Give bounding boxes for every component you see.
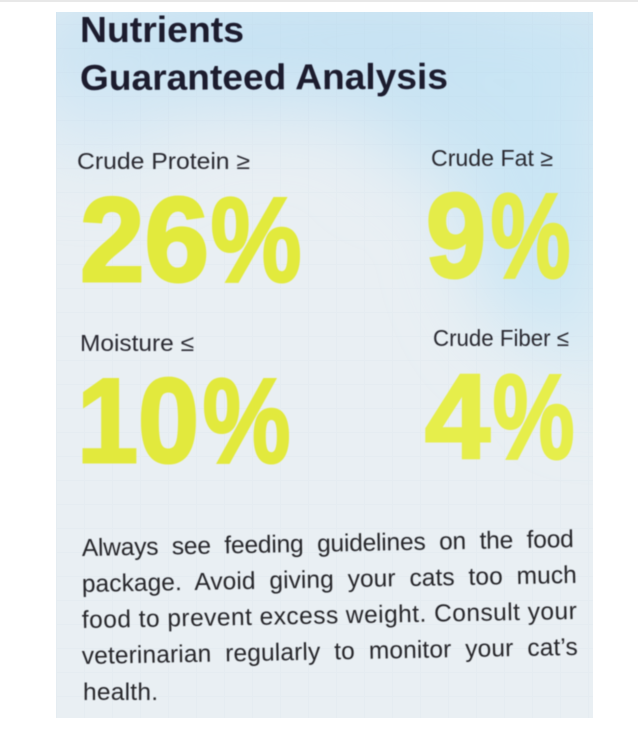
stat: crude fiber: Crude Fiber ≤ [433, 325, 569, 351]
heading: Guaranteed Analysis [80, 56, 448, 98]
stat: moisture: 10 [77, 354, 199, 488]
stat: crude fiber: 4 [425, 350, 490, 484]
stat: moisture: % [203, 356, 290, 486]
stat: crude fiber: % [493, 352, 574, 482]
stat: crude fat: 9 [426, 169, 486, 303]
heading [80, 9, 448, 98]
stat: moisture: Moisture ≤ [80, 330, 194, 356]
stat: crude protein: % [211, 175, 301, 305]
stat: crude protein: Crude Protein ≥ [77, 148, 250, 174]
text block: feeding note: health. [83, 679, 158, 706]
text block: feeding note: veterinarian regularly to monitor your cat’s [82, 634, 578, 670]
text block: feeding note: Always see feeding guidelines on the food [82, 526, 574, 562]
text block: feeding note: package. Avoid giving your cats too much [82, 562, 577, 598]
stat: crude protein [77, 148, 301, 307]
text block: feeding note: food to prevent excess weight. Consult your [82, 598, 577, 634]
heading: Nutrients [80, 9, 244, 50]
stat: crude fat: % [491, 171, 570, 301]
stat: crude fat [426, 145, 570, 303]
stat: crude fat: Crude Fat ≥ [431, 145, 553, 171]
stat: crude protein: 26 [80, 173, 209, 307]
stat: crude fiber [425, 325, 574, 484]
stat: moisture [77, 330, 290, 488]
text block: feeding note [82, 526, 578, 706]
